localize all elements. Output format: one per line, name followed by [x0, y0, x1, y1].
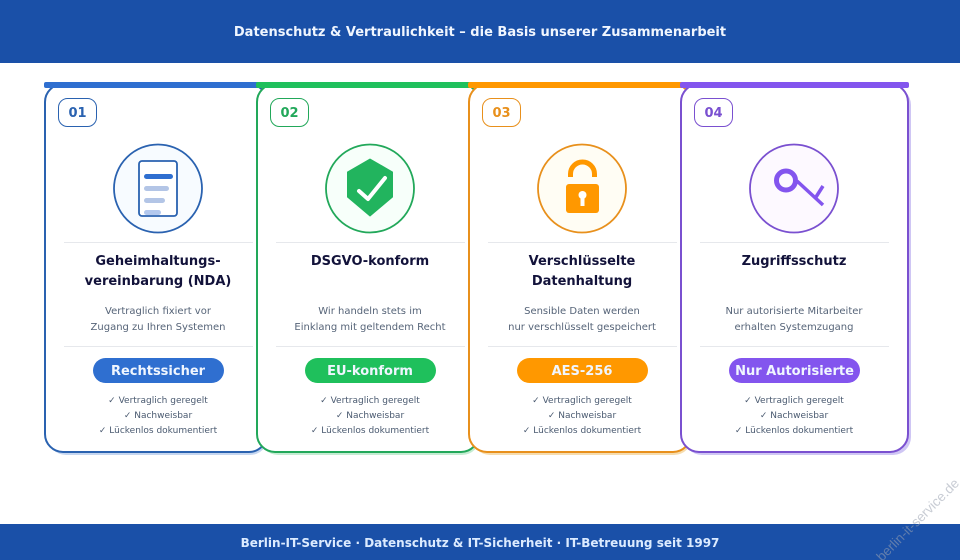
heading: DSGVO-konform [311, 254, 429, 269]
panel: card 04 access [680, 82, 911, 455]
checklist: ✓ Vertraglich geregelt [320, 396, 420, 406]
number badge 01 [58, 98, 96, 126]
checklist: ✓ Lückenlos dokumentiert [735, 426, 854, 436]
icon: key [750, 144, 838, 232]
number badge 03: 03 [492, 106, 511, 121]
number badge 03 [482, 98, 520, 126]
pill: Rechtssicher: Rechtssicher [111, 364, 206, 379]
checklist: ✓ Lückenlos dokumentiert [311, 426, 430, 436]
pill: AES-256 [517, 358, 648, 383]
heading: Zugriffsschutz [742, 254, 846, 269]
icon: padlock [538, 144, 626, 232]
panel: card 02 DSGVO [256, 82, 480, 455]
checklist: ✓ Nachweisbar [336, 411, 404, 421]
header banner [0, 0, 960, 63]
description: erhalten Systemzugang [735, 322, 853, 333]
number badge 01: 01 [68, 106, 87, 121]
checklist: ✓ Nachweisbar [548, 411, 616, 421]
heading: Verschlüsselte [529, 254, 635, 269]
footer banner [0, 524, 960, 560]
description: Sensible Daten werden [524, 306, 640, 317]
description: Vertraglich fixiert vor [105, 306, 211, 317]
footer text: Berlin-IT-Service · Datenschutz & IT-Sicherheit · IT-Betreuung seit 1997 [241, 536, 719, 550]
checklist: ✓ Lückenlos dokumentiert [523, 426, 642, 436]
heading: Datenhaltung [532, 274, 632, 289]
checklist: ✓ Nachweisbar [760, 411, 828, 421]
description: Zugang zu Ihren Systemen [91, 322, 225, 333]
description: Wir handeln stets im [318, 306, 422, 317]
panel: card 03 encryption [468, 82, 692, 455]
pill: EU-konform: EU-konform [327, 364, 413, 379]
checklist: ✓ Vertraglich geregelt [744, 396, 844, 406]
pill: Nur Autorisierte [729, 358, 860, 383]
pill: AES-256: AES-256 [552, 364, 612, 379]
icon: shield with check [326, 144, 414, 232]
icon: document [114, 144, 202, 232]
description: Nur autorisierte Mitarbeiter [725, 306, 863, 317]
checklist: ✓ Nachweisbar [124, 411, 192, 421]
number badge 04 [694, 98, 732, 126]
checklist: ✓ Vertraglich geregelt [532, 396, 632, 406]
pill: EU-konform [305, 358, 436, 383]
description: nur verschlüsselt gespeichert [508, 322, 656, 333]
checklist: ✓ Vertraglich geregelt [108, 396, 208, 406]
pill: Rechtssicher [93, 358, 224, 383]
heading: Geheimhaltungs- [95, 254, 221, 269]
title: Datenschutz & Vertraulichkeit – die Basis unserer Zusammenarbeit [234, 25, 726, 40]
number badge 02 [270, 98, 308, 126]
pill: Nur Autorisierte: Nur Autorisierte [735, 364, 854, 379]
checklist: ✓ Lückenlos dokumentiert [99, 426, 218, 436]
description: Einklang mit geltendem Recht [294, 322, 446, 333]
number badge 02: 02 [280, 106, 299, 121]
panel: card 01 NDA [44, 82, 268, 455]
heading: vereinbarung (NDA) [85, 274, 231, 289]
number badge 04: 04 [704, 106, 723, 121]
